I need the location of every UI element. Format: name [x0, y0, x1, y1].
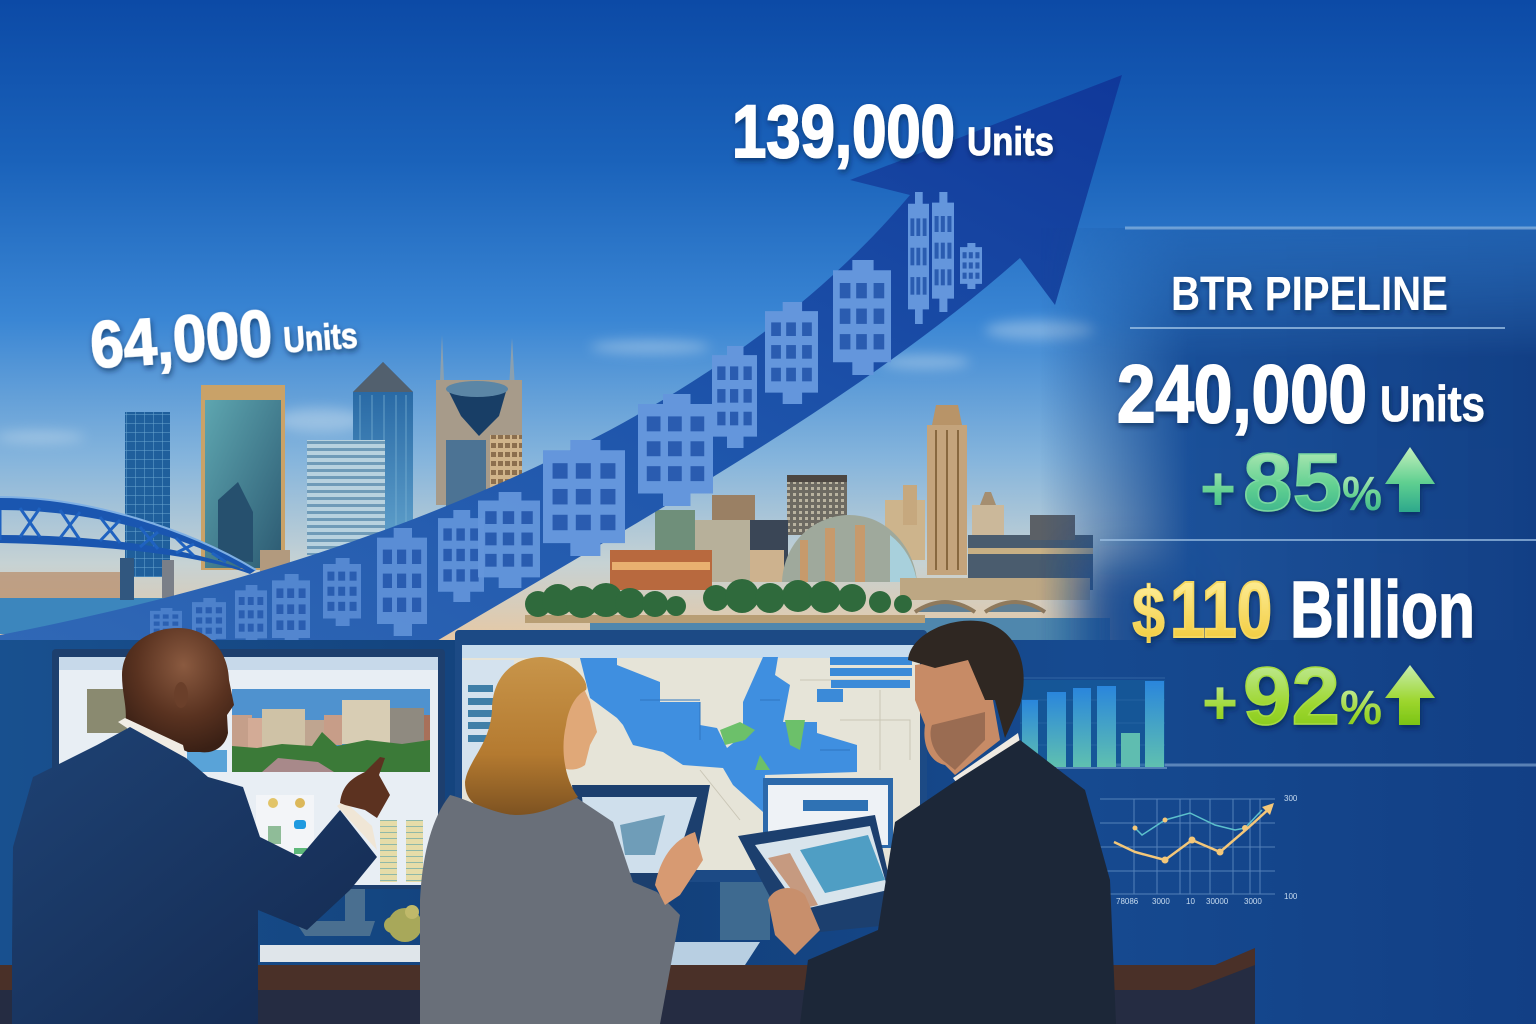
stat: +85%: +	[1200, 455, 1236, 524]
line chart: 300	[1284, 794, 1298, 803]
label: 139,000 units: Units	[967, 120, 1054, 164]
growth arrow	[0, 75, 1122, 646]
line chart: 30000	[1206, 897, 1229, 906]
plant	[384, 905, 422, 942]
left bridge and waterfront	[0, 497, 256, 634]
stat: +92%: 92	[1243, 651, 1340, 742]
buildings on arrow	[150, 192, 982, 646]
clouds	[0, 320, 1095, 482]
left monitor	[52, 649, 445, 936]
tablet: woman	[572, 785, 710, 893]
stat: $110 billion: Billion	[1290, 565, 1475, 654]
line chart: 100	[1284, 892, 1298, 901]
line chart: 78086	[1116, 897, 1139, 906]
person: man pointing	[12, 628, 390, 1024]
label: 64,000 units: Units	[282, 314, 359, 361]
bar chart	[1020, 678, 1167, 768]
stat: 240,000 units: 240,000	[1117, 349, 1367, 440]
center monitor with map	[455, 630, 927, 940]
tablet: man	[738, 815, 893, 935]
icon: up arrow	[1385, 447, 1435, 512]
right panel background	[1040, 228, 1536, 648]
line chart	[1100, 794, 1298, 906]
line chart: 3000	[1244, 897, 1262, 906]
panel dividers	[1100, 228, 1536, 765]
person: man with tablet	[768, 621, 1116, 1024]
person: woman	[420, 657, 703, 1024]
stat: $110 billion: 110	[1170, 565, 1272, 654]
stat: +85%: %	[1342, 468, 1382, 521]
stat: +85%	[1200, 437, 1435, 528]
stat: +92%: +	[1202, 669, 1238, 738]
left skyline	[125, 335, 522, 577]
stat: +92%: %	[1340, 682, 1382, 735]
stat: +92%	[1202, 651, 1435, 742]
lower background	[0, 640, 1536, 1024]
trees	[525, 579, 912, 618]
stat: $110 billion: $	[1132, 573, 1165, 653]
icon: up arrow green	[1385, 665, 1435, 725]
title: BTR pipeline: BTR PIPELINE	[1171, 268, 1448, 321]
label: 139,000 units: 139,000	[732, 90, 955, 173]
right skyline	[525, 405, 1110, 640]
stat: 240,000 units: Units	[1380, 376, 1485, 432]
sky background	[0, 0, 1536, 640]
label: 64,000 units: 64,000	[88, 295, 275, 382]
skyline fade into panel	[1085, 560, 1205, 690]
line chart: 3000	[1152, 897, 1170, 906]
stat: $110 billion	[1132, 565, 1475, 654]
photo panel	[232, 689, 430, 772]
desk	[0, 942, 1255, 1024]
stat: +85%: 85	[1243, 437, 1342, 528]
line chart: 10	[1186, 897, 1195, 906]
